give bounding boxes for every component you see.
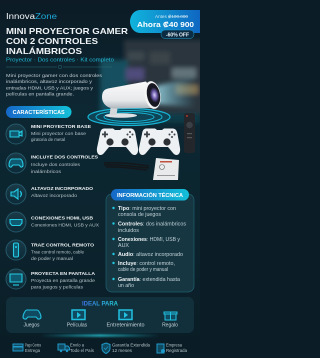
spec list: Controles : dos inalámbricos [118, 222, 187, 228]
projector beam [156, 76, 196, 108]
spec list: Audio: altavoz incorporado [118, 252, 183, 258]
feature: control remoto [6, 240, 94, 261]
trust badges [13, 342, 188, 354]
badge: envio [58, 342, 94, 353]
game controller right [139, 128, 180, 155]
discount pill: -60% OFF [166, 32, 189, 38]
spec list: Tipo: mini proyector con [118, 206, 176, 212]
title [6, 26, 128, 56]
feature: pantalla: Proyecta en pantalla grande [31, 278, 95, 283]
badge: pago [13, 342, 41, 353]
spec list: consola de juegos [118, 212, 162, 218]
divider [6, 65, 112, 69]
characteristics button [6, 106, 72, 118]
characteristics button: CARACTERÍSTICAS [13, 108, 65, 116]
logo: Innova Zone [6, 12, 58, 21]
description [6, 73, 103, 98]
description: Mini proyector gamer con dos controles [6, 73, 103, 79]
badge: empresa [157, 342, 188, 353]
use: entretenimiento: Entretenimiento [106, 322, 145, 328]
title: CON 2 CONTROLES [6, 36, 98, 46]
technical info panel [106, 189, 194, 292]
feature list [6, 124, 100, 290]
badge: envio: Envío a [70, 342, 85, 348]
badge: empresa: Empresa [166, 342, 183, 348]
spec list: Conexiones: HDMI, USB y [118, 237, 180, 243]
spec list: cable de poder y manual [118, 267, 168, 273]
feature: pantalla: para juegos y películas [31, 284, 84, 290]
description: películas en pantalla grande. [6, 92, 74, 98]
feature: mini proyector base: MINI PROYECTOR BASE [31, 124, 92, 130]
feature: mini proyector base: giratoria de metal [31, 137, 65, 142]
remote control [184, 113, 195, 153]
glow divider [40, 334, 160, 336]
ideal heading: IDEAL PARA [82, 302, 119, 308]
spec list [112, 206, 187, 289]
feature: controles: inalámbricos [31, 169, 62, 174]
game controller left [97, 128, 138, 155]
feature: altavoz: Altavoz incorporado [31, 193, 77, 198]
ideal para panel [6, 297, 194, 333]
badge: envio: Todo el País [70, 348, 94, 353]
use: peliculas: Películas [67, 322, 88, 328]
feature: conexiones [6, 212, 100, 232]
old price: Antes ₡100.000 [155, 14, 188, 19]
blurred living room backdrop [100, 40, 204, 123]
title: MINI PROYECTOR GAMER [6, 26, 128, 36]
projector base rings [88, 108, 170, 126]
spec list: AUX [118, 243, 130, 249]
feature: control remoto: Trae control remoto, cable [31, 250, 84, 254]
feature: pantalla [6, 269, 95, 290]
feature: control remoto: TRAE CONTROL REMOTO [31, 242, 94, 248]
spec list: un año [118, 283, 134, 289]
use: entretenimiento [106, 310, 145, 328]
badge: garantia: Garantía Extendida [112, 342, 151, 348]
feature: mini proyector base [6, 124, 92, 144]
manual [153, 158, 179, 180]
use: juegos [23, 310, 41, 328]
use: regalo [162, 312, 178, 328]
projector [102, 80, 163, 118]
badge: pago: Pago Contra [25, 342, 41, 348]
use: juegos: Juegos [23, 322, 40, 328]
title: INALÁMBRICOS [6, 46, 82, 56]
spec list: incluidos [118, 228, 140, 234]
feature: pantalla: PROYECTA EN PANTALLA [31, 271, 95, 277]
badge: empresa: Registrada [166, 348, 188, 353]
badge: garantia: 12 meses [112, 348, 132, 353]
feature: controles: Incluye dos controles [31, 162, 81, 167]
feature: mini proyector base: Mini proyector con base [31, 131, 86, 136]
current price: Ahora ₡40 900 [137, 20, 194, 29]
badge: garantia [102, 342, 151, 354]
spec list: Incluye: control remoto, [118, 261, 175, 267]
cable [104, 163, 149, 170]
feature: conexiones: CONEXIONES HDMI, USB [31, 216, 93, 222]
description: inalámbricos, altavoz incorporado y [6, 79, 93, 85]
panel heading: INFORMACIÓN TÉCNICA [117, 191, 183, 199]
use: peliculas [67, 310, 88, 328]
feature: conexiones: Conexiones HDMI, USB y AUX [31, 222, 100, 228]
feature: control remoto: de poder y manual [31, 256, 73, 261]
feature: controles [6, 153, 99, 174]
price badge [130, 10, 204, 38]
badge: pago: Entrega [25, 348, 41, 353]
subtitle: Proyector · Dos controles · Kit completo [6, 58, 114, 64]
spec list: Garantía : extendida hasta [118, 277, 180, 283]
use: regalo: Regalo [162, 322, 178, 328]
description: entradas HDMI, USB y AUX; juegos y [6, 85, 94, 91]
background [0, 0, 200, 358]
feature: altavoz [6, 184, 93, 204]
feature: altavoz: ALTAVOZ INCORPORADO [31, 186, 93, 192]
feature: controles: INCLUYE DOS CONTROLES [31, 154, 99, 160]
